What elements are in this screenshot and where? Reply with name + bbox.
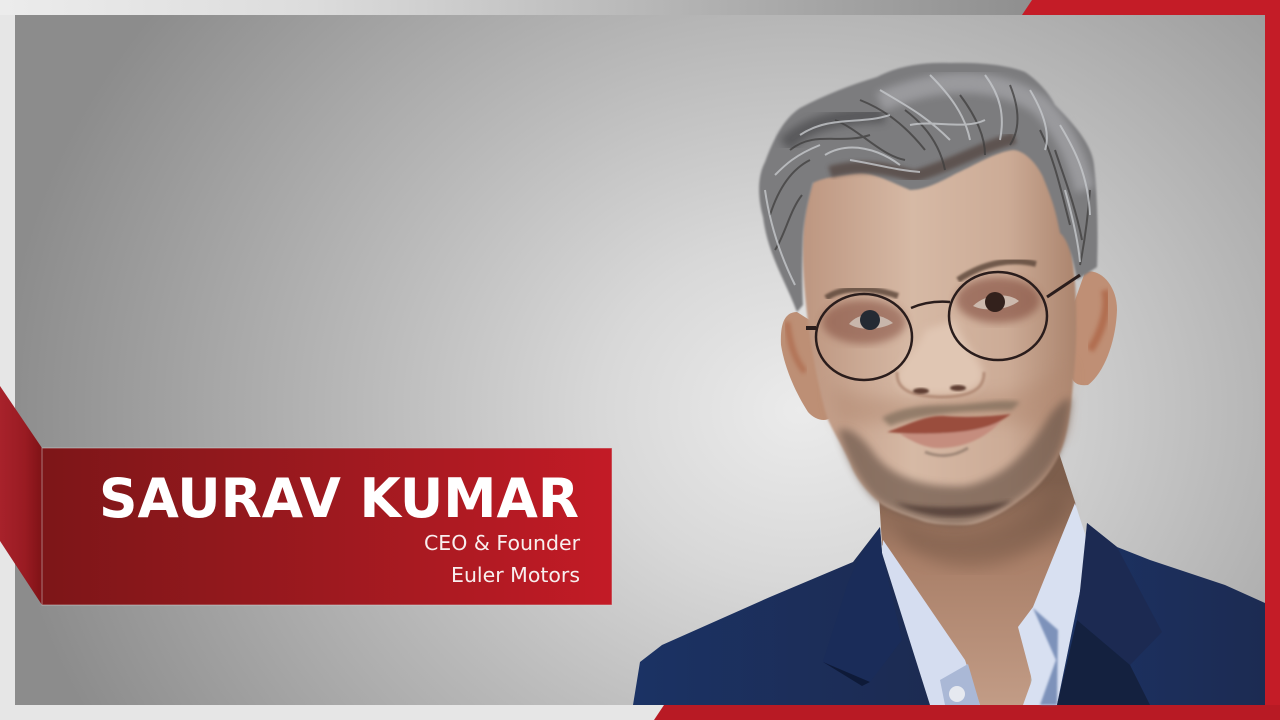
hair: strands dark: [770, 85, 1090, 265]
stubble: [838, 399, 1071, 525]
lens tint right: [956, 277, 1040, 323]
round glasses: [806, 272, 1080, 380]
left ear: [781, 312, 830, 420]
face: [803, 122, 1076, 525]
role: CEO & Founder: [424, 531, 581, 555]
moustache: [882, 401, 1020, 426]
hair: [759, 63, 1098, 312]
nose: [897, 320, 984, 397]
ribbon fold: [0, 386, 42, 605]
hair: light top band: [880, 83, 1085, 190]
jacket: [633, 523, 1265, 705]
left lapel: [823, 527, 902, 682]
name: SAURAV KUMAR: [99, 467, 579, 530]
portrait photo: [633, 63, 1265, 705]
hair: dark brown hairline band: [830, 138, 1015, 176]
left ear inner: [787, 322, 805, 372]
red frame accent: bottom: [654, 705, 1280, 720]
chin darkness: [895, 500, 1012, 517]
right lapel: [1077, 523, 1162, 665]
chin shadow on neck: [890, 490, 1066, 567]
lens tint left: [822, 300, 906, 344]
right ear inner: [1090, 290, 1106, 350]
company: Euler Motors: [451, 563, 580, 587]
cheek tone: [830, 360, 1070, 440]
neck: [878, 450, 1076, 705]
eyebrows: [826, 289, 898, 298]
mouth: [887, 414, 1011, 455]
hair: dark left crown: [785, 115, 885, 145]
eyes: [849, 292, 1019, 330]
red frame accent: top right and right edge: [1022, 0, 1280, 720]
hair: strands light: [765, 75, 1090, 285]
shirt: [882, 503, 1087, 705]
name banner: [42, 448, 612, 605]
right ear: [1068, 271, 1117, 385]
